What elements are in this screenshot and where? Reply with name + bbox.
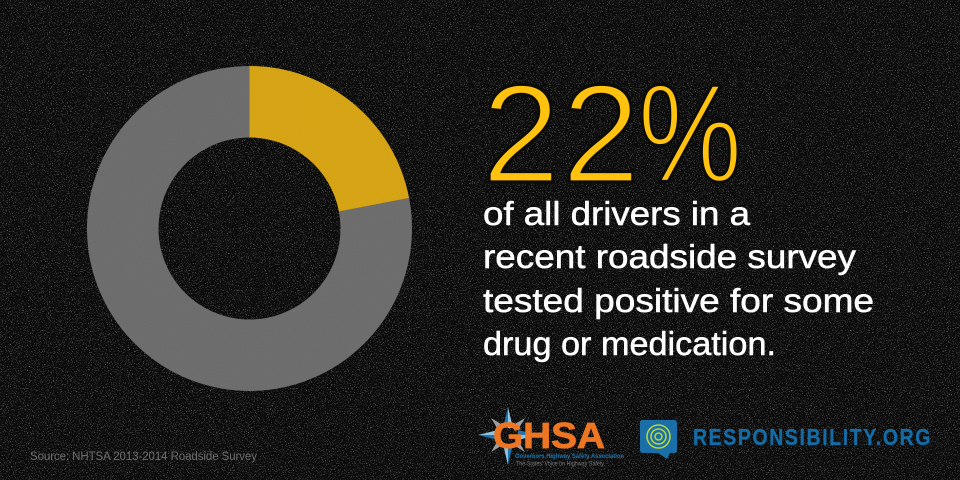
GHSA wordmark: GHSA — [493, 415, 605, 456]
source note: Source: NHTSA 2013-2014 Roadside Survey — [30, 451, 257, 463]
donut chart — [87, 66, 412, 391]
description text: tested positive for some — [483, 283, 874, 320]
icon: compass star — [478, 407, 538, 465]
description text: recent roadside survey — [483, 239, 856, 276]
donut segment: other 78% — [87, 66, 412, 391]
big statistic 22%: 22 — [482, 55, 640, 212]
description text: drug or medication. — [483, 326, 776, 363]
icon: speech bubble target — [640, 420, 677, 459]
percent sign: % — [638, 54, 742, 212]
donut segment: 22% — [250, 66, 409, 212]
GHSA tagline 1: Governors Highway Safety Association — [515, 453, 624, 460]
description text: of all drivers in a — [483, 196, 750, 233]
description text — [483, 196, 874, 363]
logo: GHSA — [478, 407, 624, 468]
logo: Responsibility.org — [640, 420, 932, 459]
GHSA tagline 2: The States' Voice on Highway Safety — [516, 462, 604, 468]
